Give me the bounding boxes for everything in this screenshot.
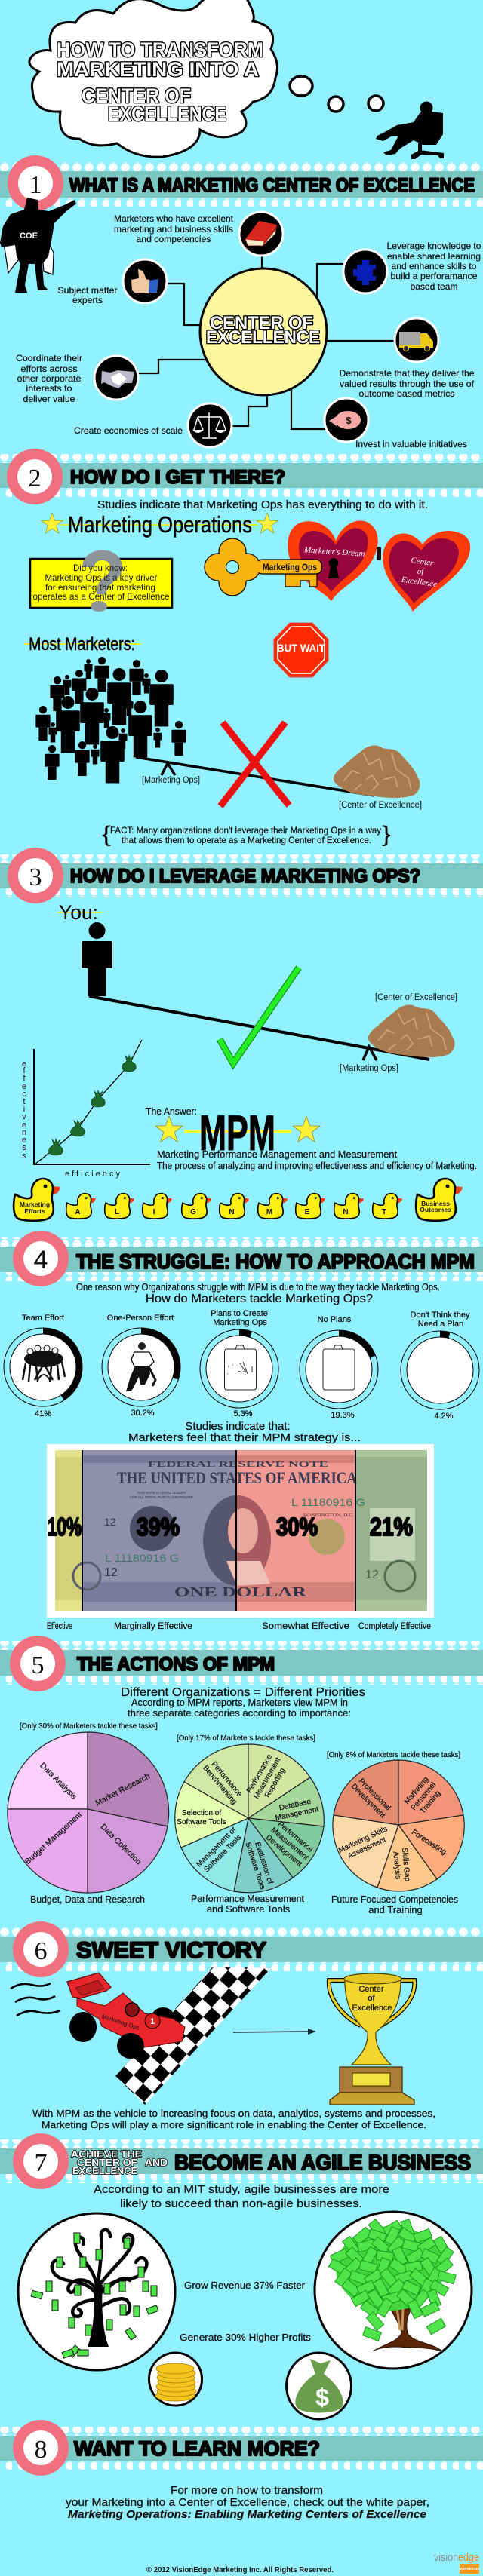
speed lines <box>11 1983 60 2016</box>
section 7 banner: EXCELLENCE <box>72 2165 137 2176</box>
section 5 intro: Different Organizations = Different Priorities <box>121 1686 365 1699</box>
pie chart: future focused competencies and training: Forecasting <box>410 1828 448 1857</box>
pie chart: budget, data and research: Budget, Data and Research <box>30 1894 145 1905</box>
percent labels: 39% <box>137 1513 180 1541</box>
trophy: Center <box>358 1985 384 1994</box>
the answer: MPM: Marketing Performance Management and Measurement <box>157 1148 397 1160</box>
pie chart: performance measurement and software tools: Performance <box>210 1760 244 1799</box>
studies heading: Marketers feel that their MPM strategy is... <box>128 1431 361 1444</box>
alignment ducks row: N <box>229 1208 235 1216</box>
pie chart: budget, data and research: Data Analysis <box>38 1761 78 1802</box>
closing text: Marketing Operations: Enabling Marketing Centers of Excellence <box>68 2508 426 2521</box>
pie chart: performance measurement and software tools: and Software Tools <box>207 1903 291 1915</box>
section 7 intro: likely to succeed than non-agile businesses. <box>120 2197 362 2210</box>
bill ornament: FOR ALL DEBTS, PUBLIC AND PRIVATE <box>130 1495 193 1499</box>
pie chart: performance measurement and software tools: Measurement <box>252 1756 283 1800</box>
the answer: MPM: The Answer: <box>146 1106 197 1117</box>
alignment ducks row: Business <box>421 1200 450 1207</box>
pie chart: budget, data and research: Budget Management <box>23 1811 84 1866</box>
chart: effectiveness vs efficiency: efficiency <box>65 1170 121 1179</box>
center of excellence hub <box>200 268 327 395</box>
donut: don't think they need a plan 4.2%: Need a Plan <box>418 1320 463 1329</box>
donut: no plans 19.3% <box>300 1315 378 1420</box>
section 5 intro: According to MPM reports, Marketers view MPM in <box>131 1697 348 1708</box>
callouts around the hub: based team <box>411 281 457 292</box>
pie chart: performance measurement and software tools: Database <box>278 1798 312 1812</box>
icon: thumbs up <box>123 259 167 303</box>
pie chart: budget, data and research <box>8 1722 169 1905</box>
callouts around the hub: Leverage knowledge to <box>386 241 481 251</box>
pie chart: performance measurement and software tools: Software Tools <box>244 1842 266 1891</box>
percent labels: 30% <box>276 1513 318 1541</box>
bill ornament: THIS NOTE IS LEGAL TENDER <box>137 1491 186 1495</box>
closing text: your Marketing into a Center of Excellence, check out the white paper, <box>66 2496 429 2509</box>
fact callout: that allows them to operate as a Marketing Center of Excellence. <box>122 835 371 845</box>
grow revenue and profits stats: Generate 30% Higher Profits <box>180 2332 312 2343</box>
lever: marketing ops tipped wrong way <box>136 746 422 810</box>
title text: HOW TO TRANSFORM <box>57 38 263 61</box>
bill ornament <box>55 1455 427 1602</box>
pie chart: future focused competencies and training: and Training <box>368 1904 423 1915</box>
pie chart: performance measurement and software tools: Measurement <box>269 1826 310 1862</box>
title text: EXCELLENCE <box>108 103 226 125</box>
pie chart: performance measurement and software tools: Software Tools <box>202 1833 243 1874</box>
icon: gold coins <box>149 2353 202 2406</box>
section 2 banner <box>0 449 483 504</box>
title thought cloud <box>29 0 277 157</box>
section 4 intro <box>76 1281 440 1305</box>
lever: marketing ops lifting rock: [Marketing Ops] <box>340 1064 398 1073</box>
alignment ducks row: M <box>266 1208 272 1216</box>
icon: green money bag: $ <box>315 2384 329 2411</box>
intro text section 2: Studies indicate that Marketing Ops has everything to do with it. <box>97 499 428 511</box>
pie chart: future focused competencies and training: Marketing Skills <box>337 1825 389 1855</box>
red race car <box>67 1973 185 2059</box>
bill segment labels: Somewhat Effective <box>262 1622 349 1631</box>
green money tree <box>315 2212 472 2369</box>
marketing operations heading: Marketing Operations <box>68 511 252 538</box>
icon: blue puzzle piece <box>343 250 387 293</box>
you heading: You: <box>59 901 98 924</box>
section 3 banner <box>0 848 483 903</box>
callouts around the hub: Create economies of scale <box>74 425 183 436</box>
icon: piggy bank <box>325 398 368 442</box>
pie chart: future focused competencies and training: Skills Gap <box>400 1848 411 1882</box>
the answer: MPM: MPM <box>199 1105 275 1161</box>
donut: don't think they need a plan 4.2%: Don't Think they <box>411 1311 470 1320</box>
stop sign: but wait: BUT WAIT <box>277 642 326 654</box>
icon: yellow truck <box>395 318 438 362</box>
center of excellence hub: CENTER OF <box>210 313 313 333</box>
alignment ducks row: G <box>190 1208 196 1216</box>
title text: CENTER OF <box>82 84 191 107</box>
bill ornament: L 11180916 G <box>291 1496 365 1508</box>
money bags on curve <box>49 1055 136 1155</box>
lever: marketing ops lifting rock: [Center of Excellence] <box>375 993 457 1002</box>
icon: COE superhero: COE <box>20 232 38 241</box>
closing text: For more on how to transform <box>171 2484 323 2497</box>
pie chart: performance measurement and software tools: Performance <box>276 1820 315 1854</box>
chart: effectiveness vs efficiency: effectiveness <box>22 1060 26 1161</box>
section 1 banner <box>0 155 483 211</box>
bill ornament: L 11180916 G <box>105 1552 179 1564</box>
icon: keyhole <box>328 558 339 578</box>
section 7 banner: ACHIEVE THE <box>71 2148 142 2160</box>
hearts locket: of <box>417 567 425 576</box>
center of excellence hub: EXCELLENCE <box>206 327 320 348</box>
crowd of marketers <box>35 657 186 783</box>
pie chart: performance measurement and software tools: Management of <box>195 1826 238 1869</box>
section 8 banner: WANT TO LEARN MORE? <box>74 2437 320 2460</box>
alignment ducks row: T <box>382 1208 386 1216</box>
donut: plans to create marketing ops 5.3%: Marketing Ops <box>213 1318 267 1327</box>
grow revenue and profits stats: Grow Revenue 37% Faster <box>184 2280 306 2291</box>
pie chart: budget, data and research: Data Collection <box>99 1822 143 1866</box>
hearts locket <box>288 520 470 612</box>
pie chart: future focused competencies and training: Development <box>349 1783 387 1820</box>
studies heading <box>128 1420 361 1444</box>
section 2 banner: 2 <box>29 465 41 492</box>
callouts around the hub: outcome based metrics <box>359 388 454 399</box>
bill ornament: FEDERAL RESERVE NOTE <box>148 1460 328 1469</box>
arrow to trophy <box>233 2029 316 2035</box>
grow revenue and profits stats <box>180 2280 312 2343</box>
donut: team effort 41%: Team Effort <box>22 1314 64 1323</box>
bill segment labels: Effective <box>47 1622 72 1631</box>
dollar bill strategy bar <box>47 1444 434 1618</box>
person on lever <box>82 922 112 996</box>
alignment ducks row: I <box>153 1208 155 1216</box>
pie chart: future focused competencies and training: Future Focused Competencies <box>331 1894 458 1905</box>
bill ornament: 12 <box>365 1569 379 1581</box>
pie chart: performance measurement and software tools: Performance Measurement <box>191 1893 304 1904</box>
lever: marketing ops lifting rock <box>89 993 457 1073</box>
did you know callout <box>30 550 172 612</box>
section 7 banner <box>0 2133 483 2189</box>
did you know callout: for ensureing that marketing <box>45 582 155 593</box>
thought bubbles <box>290 76 383 112</box>
donut: plans to create marketing ops 5.3% <box>200 1309 278 1418</box>
alignment ducks row: Efforts <box>24 1207 45 1215</box>
donut: team effort 41%: 41% <box>35 1409 51 1418</box>
callouts around the hub: and competencies <box>136 234 211 244</box>
callouts around the hub: build a perforamance <box>391 271 478 281</box>
title text <box>57 38 263 125</box>
section 7 banner: BECOME AN AGILE BUSINESS <box>174 2151 471 2174</box>
pie chart: performance measurement and software tools: Development <box>264 1833 303 1869</box>
pie chart: future focused competencies and training: Professional <box>357 1777 392 1812</box>
closing text <box>66 2484 429 2521</box>
visionedge logo: MARKETING <box>459 2567 480 2571</box>
connector lines <box>137 255 395 429</box>
red race car: Marketing Ops <box>101 2013 140 2032</box>
icon: COE superhero <box>0 198 76 293</box>
the answer: MPM <box>146 1105 477 1171</box>
hanging bills <box>31 2233 158 2358</box>
pie chart: performance measurement and software tools: [Only 17% of Marketers tackle these tasks] <box>177 1734 315 1743</box>
alignment ducks row: L <box>115 1208 119 1216</box>
donut: no plans 19.3%: 19.3% <box>331 1411 355 1420</box>
section 2 banner: HOW DO I GET THERE? <box>70 467 285 488</box>
bill ornament: 12 <box>104 1566 118 1579</box>
pie chart: future focused competencies and training: Training <box>419 1789 442 1815</box>
donut: one-person effort 30.2%: 30.2% <box>131 1409 155 1418</box>
donut: one-person effort 30.2% <box>102 1314 180 1418</box>
pie chart: budget, data and research: [Only 30% of Marketers tackle these tasks] <box>20 1722 158 1731</box>
callouts around the hub: interests to <box>26 383 72 394</box>
bill ornament: WASHINGTON, D.C. <box>303 1513 354 1518</box>
bill segment labels <box>47 1622 431 1631</box>
section 5 banner <box>0 1636 483 1691</box>
pie chart: future focused competencies and training <box>327 1751 464 1915</box>
fact callout: { <box>102 822 111 847</box>
fact callout <box>102 822 391 847</box>
trophy: of <box>368 1994 376 2003</box>
alignment ducks row: A <box>75 1208 81 1216</box>
bill segment labels: Completely Effective <box>358 1622 431 1631</box>
section 6 body text <box>32 2108 435 2130</box>
pie chart: performance measurement and software tools: Benchmarking <box>201 1764 238 1806</box>
section 5 banner: THE ACTIONS OF MPM <box>77 1654 275 1675</box>
pie chart: future focused competencies and training: Personnel <box>410 1781 438 1812</box>
alignment ducks row <box>14 1179 463 1221</box>
pie chart: future focused competencies and training: [Only 8% of Marketers tackle these tasks] <box>327 1751 460 1759</box>
section 4 banner: 4 <box>34 1246 48 1274</box>
icon: red book <box>239 212 283 256</box>
callouts around the hub: valued results through the use of <box>340 379 475 389</box>
section 4 intro: How do Marketers tackle Marketing Ops? <box>146 1293 373 1305</box>
alignment ducks row: Outcomes <box>420 1206 451 1213</box>
callouts around the hub: Coordinate their <box>16 353 82 363</box>
hearts locket: Center <box>411 556 435 568</box>
did you know callout: Did you know: <box>73 563 128 573</box>
bill ornament: THE UNITED STATES OF AMERICA <box>117 1468 357 1487</box>
section 8 banner: 8 <box>35 2436 47 2464</box>
red race car: 1 <box>150 2017 155 2026</box>
percent labels: 21% <box>370 1513 413 1541</box>
section 7 banner: AND <box>145 2157 168 2168</box>
percent labels <box>48 1513 413 1541</box>
hearts locket: Excellence <box>400 575 438 589</box>
callouts around the hub: marketing and business skills <box>114 224 233 235</box>
alignment ducks row: N <box>343 1208 349 1216</box>
green check mark <box>220 968 299 1063</box>
pie chart: performance measurement and software tools <box>175 1734 324 1915</box>
did you know callout: operates as a Center of Excellence <box>33 591 170 602</box>
section 1 banner: 1 <box>29 171 42 199</box>
callouts around the hub <box>16 213 481 449</box>
icon: scales <box>188 403 232 447</box>
alignment ducks row: E <box>305 1208 310 1216</box>
studies heading: Studies indicate that: <box>185 1420 291 1433</box>
pie chart: budget, data and research: Market Research <box>94 1771 152 1808</box>
bill ornament: 12 <box>104 1516 116 1528</box>
section 7 banner: 7 <box>35 2149 47 2177</box>
alignment ducks row: Marketing <box>20 1201 50 1208</box>
copyright: © 2012 VisionEdge Marketing Inc. All Rights Reserved. <box>146 2566 334 2574</box>
pie chart: performance measurement and software tools: Management <box>275 1805 319 1823</box>
stop sign: but wait <box>274 623 328 677</box>
fact callout: } <box>382 822 391 847</box>
section 5 banner: 5 <box>32 1651 44 1679</box>
golden key: Marketing Ops <box>263 562 317 572</box>
title text: MARKETING INTO A <box>57 58 259 81</box>
section 5 intro <box>121 1686 365 1719</box>
icon: green money bag <box>287 2353 352 2419</box>
callouts around the hub: enable shared learning <box>387 251 481 262</box>
section 3 banner: HOW DO I LEVERAGE MARKETING OPS? <box>70 866 420 887</box>
donut: plans to create marketing ops 5.3%: Plans to Create <box>211 1309 268 1318</box>
callouts around the hub: deliver value <box>23 394 75 404</box>
pie chart: performance measurement and software tools: Evaluation of <box>253 1841 275 1885</box>
section 8 banner <box>0 2420 483 2476</box>
did you know callout: Marketing Ops is a key driver <box>45 572 157 583</box>
bill ornament: ONE DOLLAR <box>174 1584 307 1599</box>
checkered flag <box>115 1967 271 2105</box>
pie chart: performance measurement and software tools: Reporting <box>263 1767 287 1799</box>
icon: piggy bank: $ <box>346 415 352 426</box>
callouts around the hub: and enhance skills to <box>391 261 477 271</box>
section 7 banner: CENTER OF <box>77 2157 137 2168</box>
black money tree <box>18 2213 175 2370</box>
most marketers heading: Most Marketers: <box>29 634 135 655</box>
pie chart: performance measurement and software tools: Software Tools <box>177 1818 226 1826</box>
donut: don't think they need a plan 4.2%: 4.2% <box>434 1412 454 1421</box>
fact callout: FACT: Many organizations don't leverage their Marketing Ops in a way <box>110 825 381 836</box>
donut: no plans 19.3%: No Plans <box>318 1315 352 1324</box>
section 6 body text: With MPM as the vehicle to increasing focus on data, analytics, systems and processes, <box>32 2108 435 2119</box>
pie chart: future focused competencies and training: Analysis <box>391 1851 402 1880</box>
donut: don't think they need a plan 4.2% <box>401 1311 479 1421</box>
trophy <box>329 1973 414 2105</box>
percent labels: 10% <box>48 1513 82 1541</box>
icon: thinking man in office chair <box>376 101 444 159</box>
callouts around the hub: experts <box>72 295 103 305</box>
section 7 intro <box>94 2183 389 2210</box>
canopy bills <box>328 2219 456 2341</box>
section 6 body text: Marketing Ops will play a more significant role in enabling the Center of Excellence. <box>42 2119 426 2130</box>
lever: marketing ops tipped wrong way: [Marketing Ops] <box>142 776 200 785</box>
hearts locket: Marketer's Dream <box>303 545 365 559</box>
donut: team effort 41% <box>4 1314 82 1418</box>
visionedge logo <box>434 2552 480 2574</box>
icon: handshake <box>94 356 138 400</box>
pie chart: future focused competencies and training: Marketing <box>403 1775 431 1806</box>
pie chart: performance measurement and software tools: Selection of <box>182 1809 221 1817</box>
golden key <box>205 538 321 596</box>
section 4 banner <box>0 1231 483 1286</box>
callouts around the hub: efforts across <box>21 363 77 374</box>
section 5 intro: three separate categories according to importance: <box>128 1707 351 1719</box>
red x mark <box>220 722 289 806</box>
section 7 intro: According to an MIT study, agile businesses are more <box>94 2183 389 2196</box>
lever: marketing ops tipped wrong way: [Center of Excellence] <box>339 801 422 810</box>
trophy: Excellence <box>352 2004 392 2013</box>
bill segment labels: Marginally Effective <box>114 1622 192 1631</box>
section 6 banner <box>0 1921 483 1977</box>
pie chart: future focused competencies and training: Assessment <box>346 1835 387 1860</box>
donut: one-person effort 30.2%: One-Person Effort <box>107 1314 174 1323</box>
section 6 banner: SWEET VICTORY <box>76 1938 266 1963</box>
callouts around the hub: Marketers who have excellent <box>114 213 234 224</box>
section 3 banner: 3 <box>29 863 42 891</box>
section 6 banner: 6 <box>35 1937 47 1965</box>
callouts around the hub: Demonstrate that they deliver the <box>340 368 475 379</box>
pie chart: performance measurement and software tools: Performance <box>245 1753 274 1795</box>
donut: plans to create marketing ops 5.3%: 5.3% <box>233 1409 253 1418</box>
chart: effectiveness vs efficiency <box>22 1040 150 1179</box>
visionedge logo: visionedge <box>434 2552 479 2564</box>
callouts around the hub: Subject matter <box>57 285 118 296</box>
callouts around the hub: other corporate <box>17 373 82 384</box>
callouts around the hub: Invest in valuable initiatives <box>355 439 467 449</box>
section 4 intro: One reason why Organizations struggle with MPM is due to the way they tackle Marketing Ops. <box>76 1281 440 1293</box>
